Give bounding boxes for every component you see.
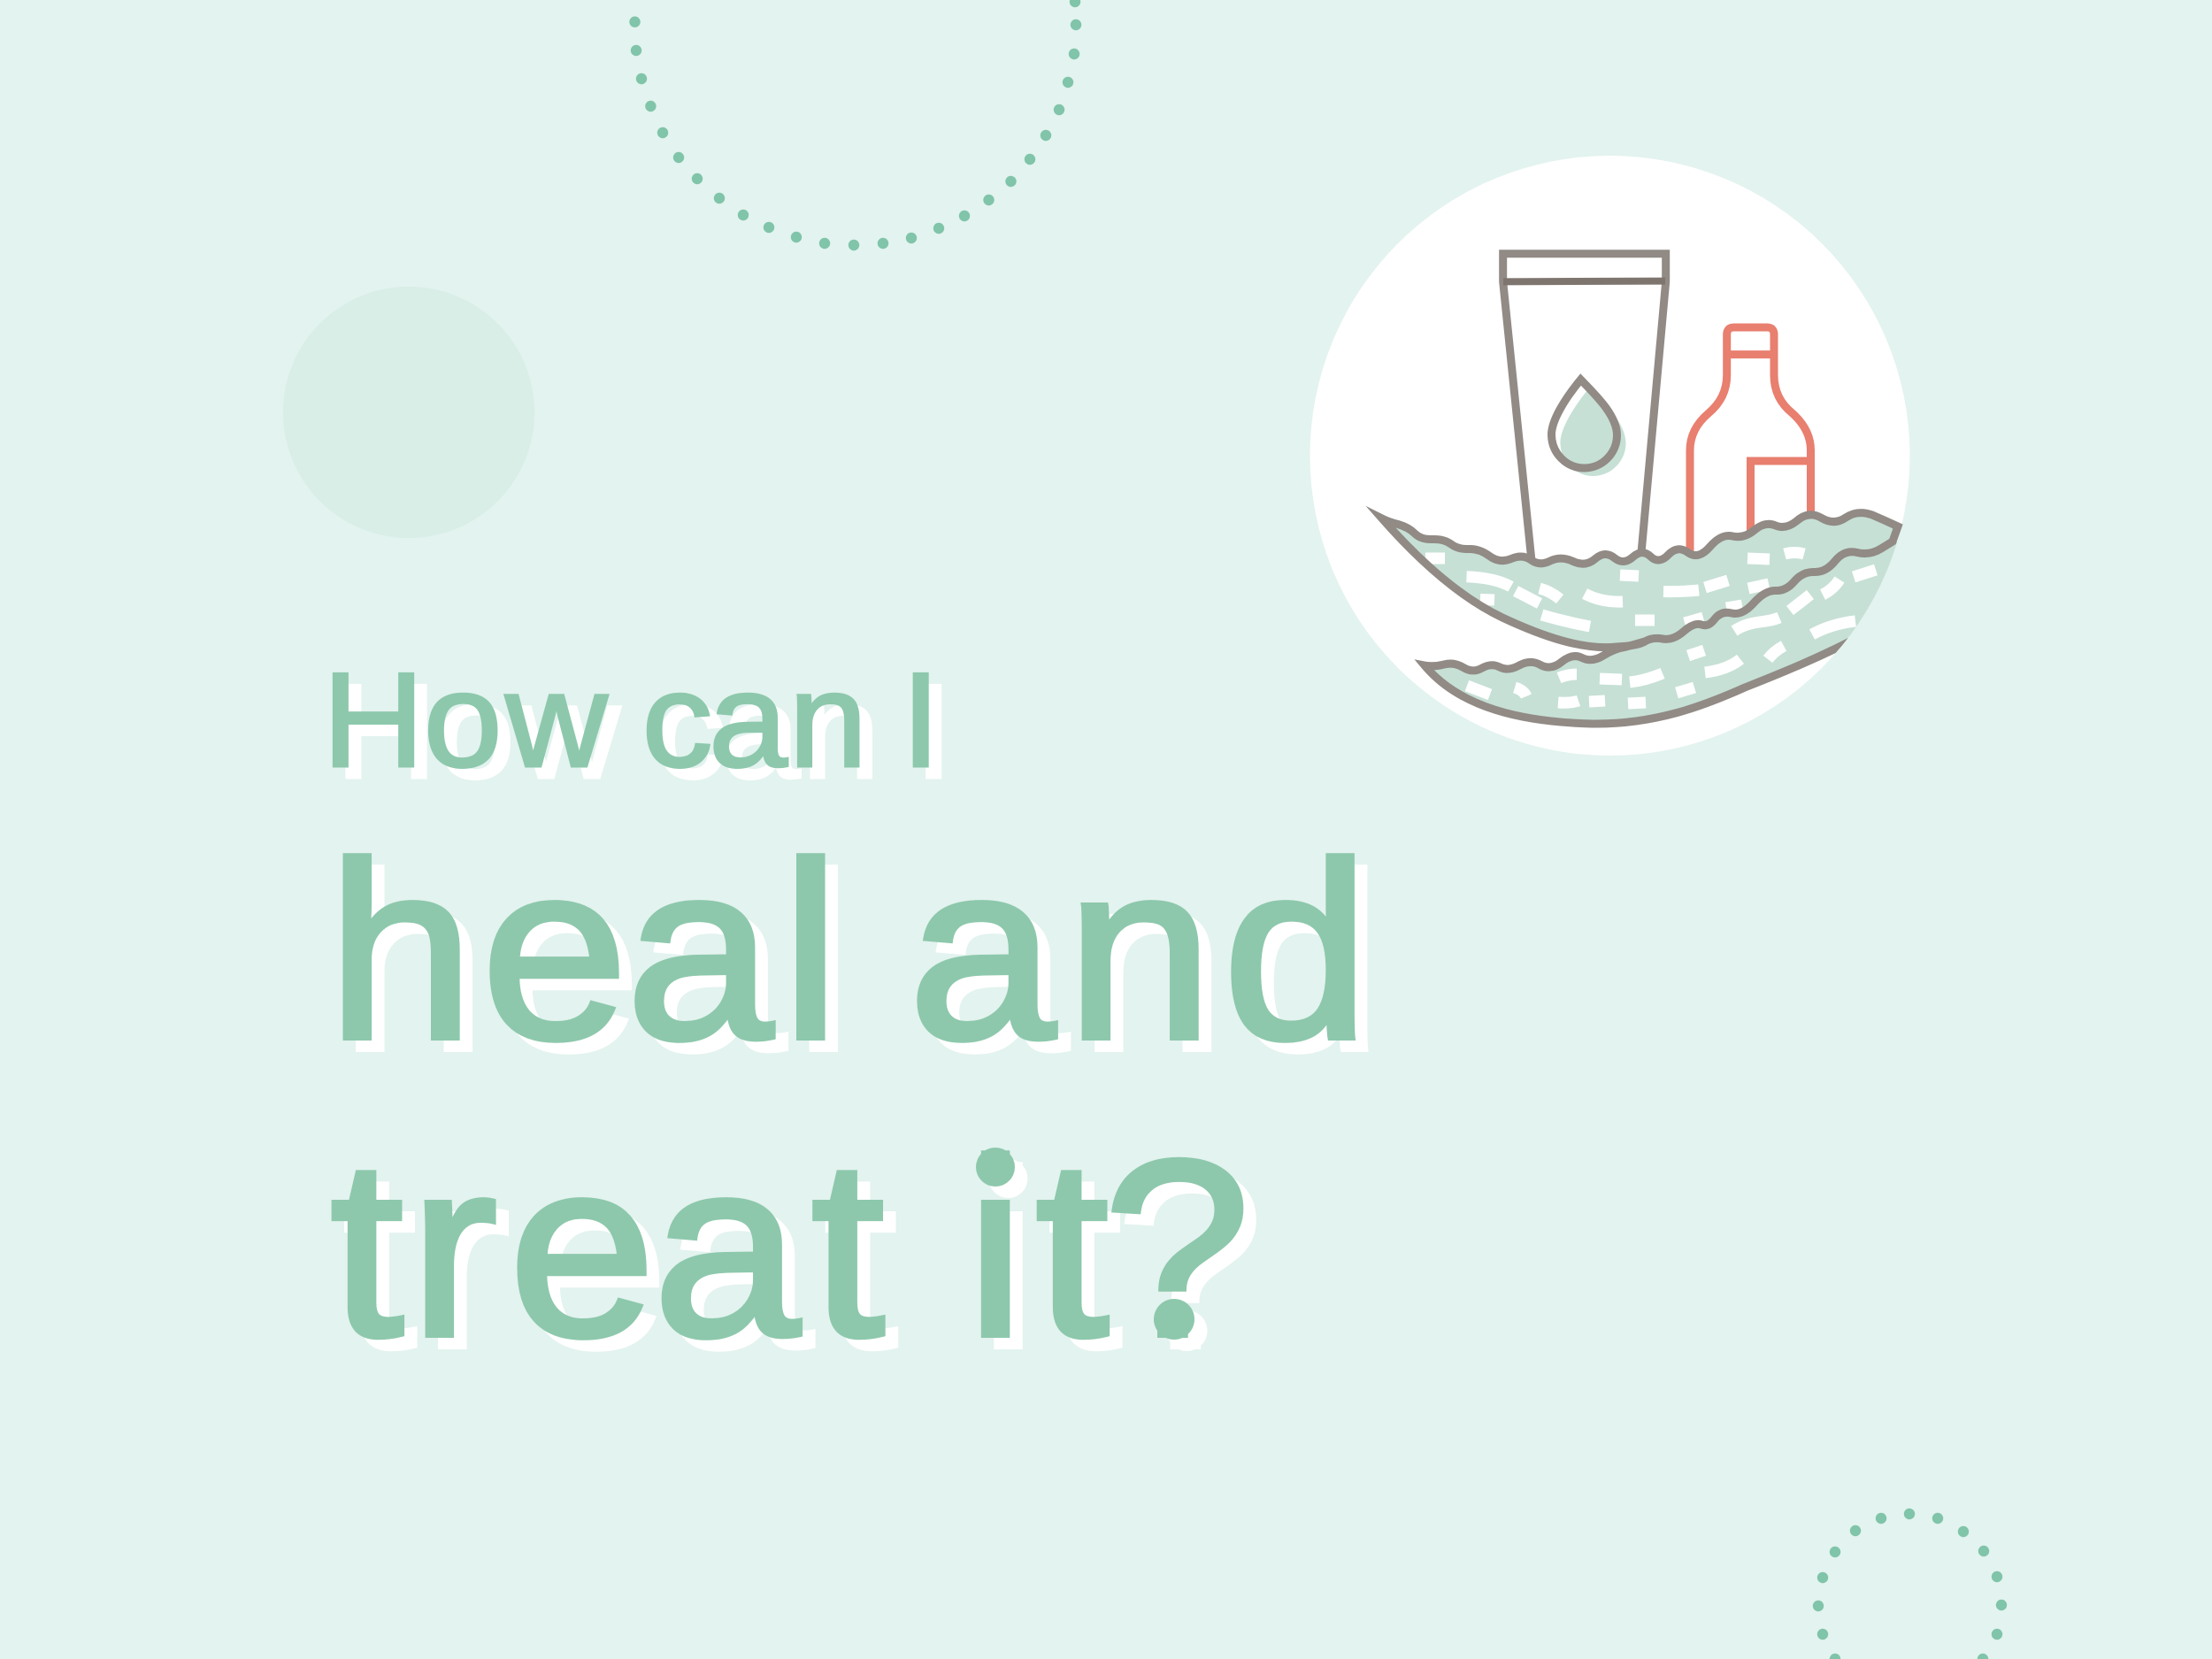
- aloe leaf: upper, fill: [1382, 513, 1898, 648]
- headline: [322, 645, 1382, 1400]
- headline line 1: How can I: How can I: [322, 645, 941, 795]
- illustration: skincare products and aloe leaves: [1310, 156, 1920, 756]
- aloe leaf: upper, white flecks: [1425, 552, 1804, 626]
- icon: lotion tube: [1503, 254, 1666, 561]
- white circle backdrop: [1310, 156, 1909, 756]
- infographic canvas: [283, 0, 2007, 1659]
- headline shadow: treat it?: [343, 1119, 1263, 1400]
- lower leaf outline: [1425, 633, 1867, 724]
- round dots on i and question mark: [976, 1148, 1194, 1340]
- headline shadow: [335, 657, 1382, 1400]
- icon: bottle: [1690, 327, 1810, 553]
- aloe leaf: lower, fill with flecks: [1425, 541, 1920, 724]
- headline shadow: How can I: [335, 657, 953, 807]
- headline line 2: heal and: heal and: [327, 810, 1370, 1091]
- upper leaf outline: [1382, 513, 1898, 648]
- headline shadow: heal and: [341, 822, 1382, 1102]
- dotted arc: bottom right: [1813, 1509, 2007, 1659]
- dotted arc: top: [629, 0, 1081, 250]
- lower leaf flecks: [1467, 570, 1876, 703]
- decorative pale green circle: [283, 287, 534, 538]
- headline line 3: treat it?: treat it?: [330, 1108, 1250, 1388]
- icon: water drop on tube: [1551, 380, 1626, 476]
